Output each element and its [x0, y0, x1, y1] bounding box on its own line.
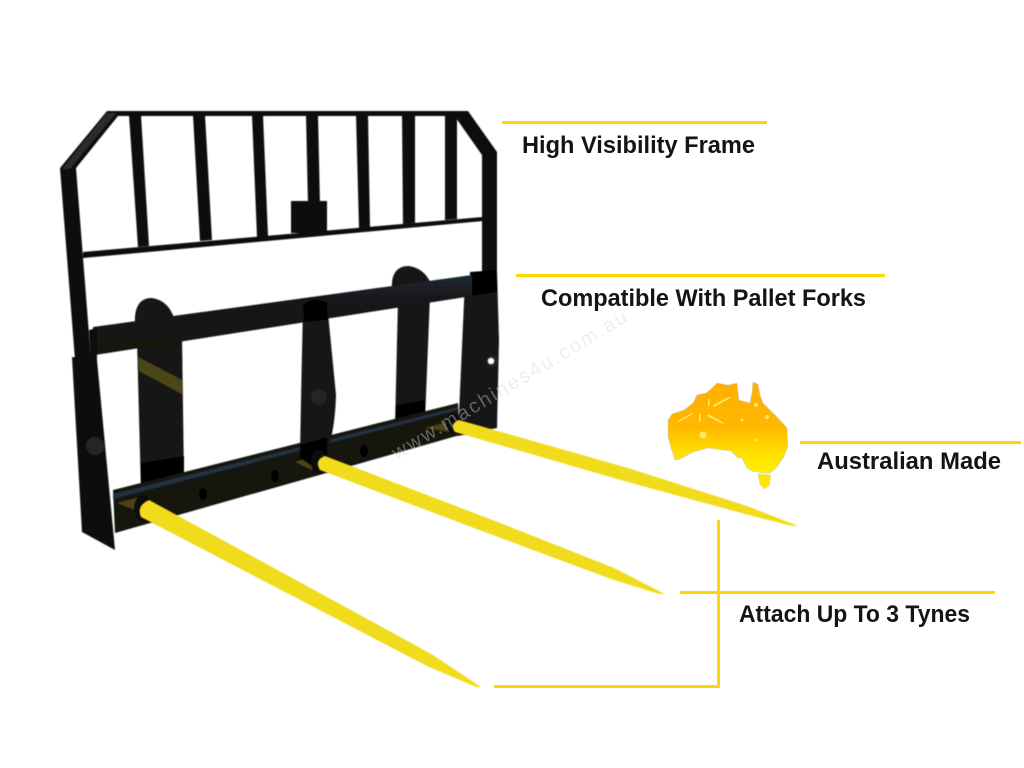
icon: Tasmania	[758, 474, 771, 489]
lower bar	[113, 403, 460, 533]
left side plate	[72, 357, 115, 550]
lugs	[135, 266, 431, 323]
callout: Australian made: Australian Made	[817, 448, 1001, 475]
centre plate	[300, 299, 336, 466]
callout: Australian made	[800, 441, 1021, 475]
tynes	[140, 420, 798, 687]
upper guard frame	[60, 111, 497, 360]
callout: compatible with pallet forks: Compatible With Pallet Forks	[541, 285, 866, 312]
callout: attach up to 3 tynes	[494, 520, 995, 688]
icon: Australia map	[668, 382, 788, 489]
watermark: www.machines4u.com.au	[387, 306, 631, 465]
crossbar	[93, 275, 472, 355]
callout: high visibility frame	[502, 121, 767, 159]
pallet fork frame	[60, 111, 499, 550]
callout: high visibility frame: High Visibility Frame	[522, 132, 755, 159]
flag stars	[678, 397, 769, 442]
upright plates	[137, 270, 499, 492]
tyne: rear	[453, 420, 798, 526]
tyne: middle	[318, 456, 665, 594]
callout: compatible with pallet forks	[516, 274, 885, 312]
tyne: front	[140, 500, 481, 687]
tyne collars	[134, 413, 460, 521]
callout: attach up to 3 tynes: Attach Up To 3 Tynes	[739, 601, 970, 628]
